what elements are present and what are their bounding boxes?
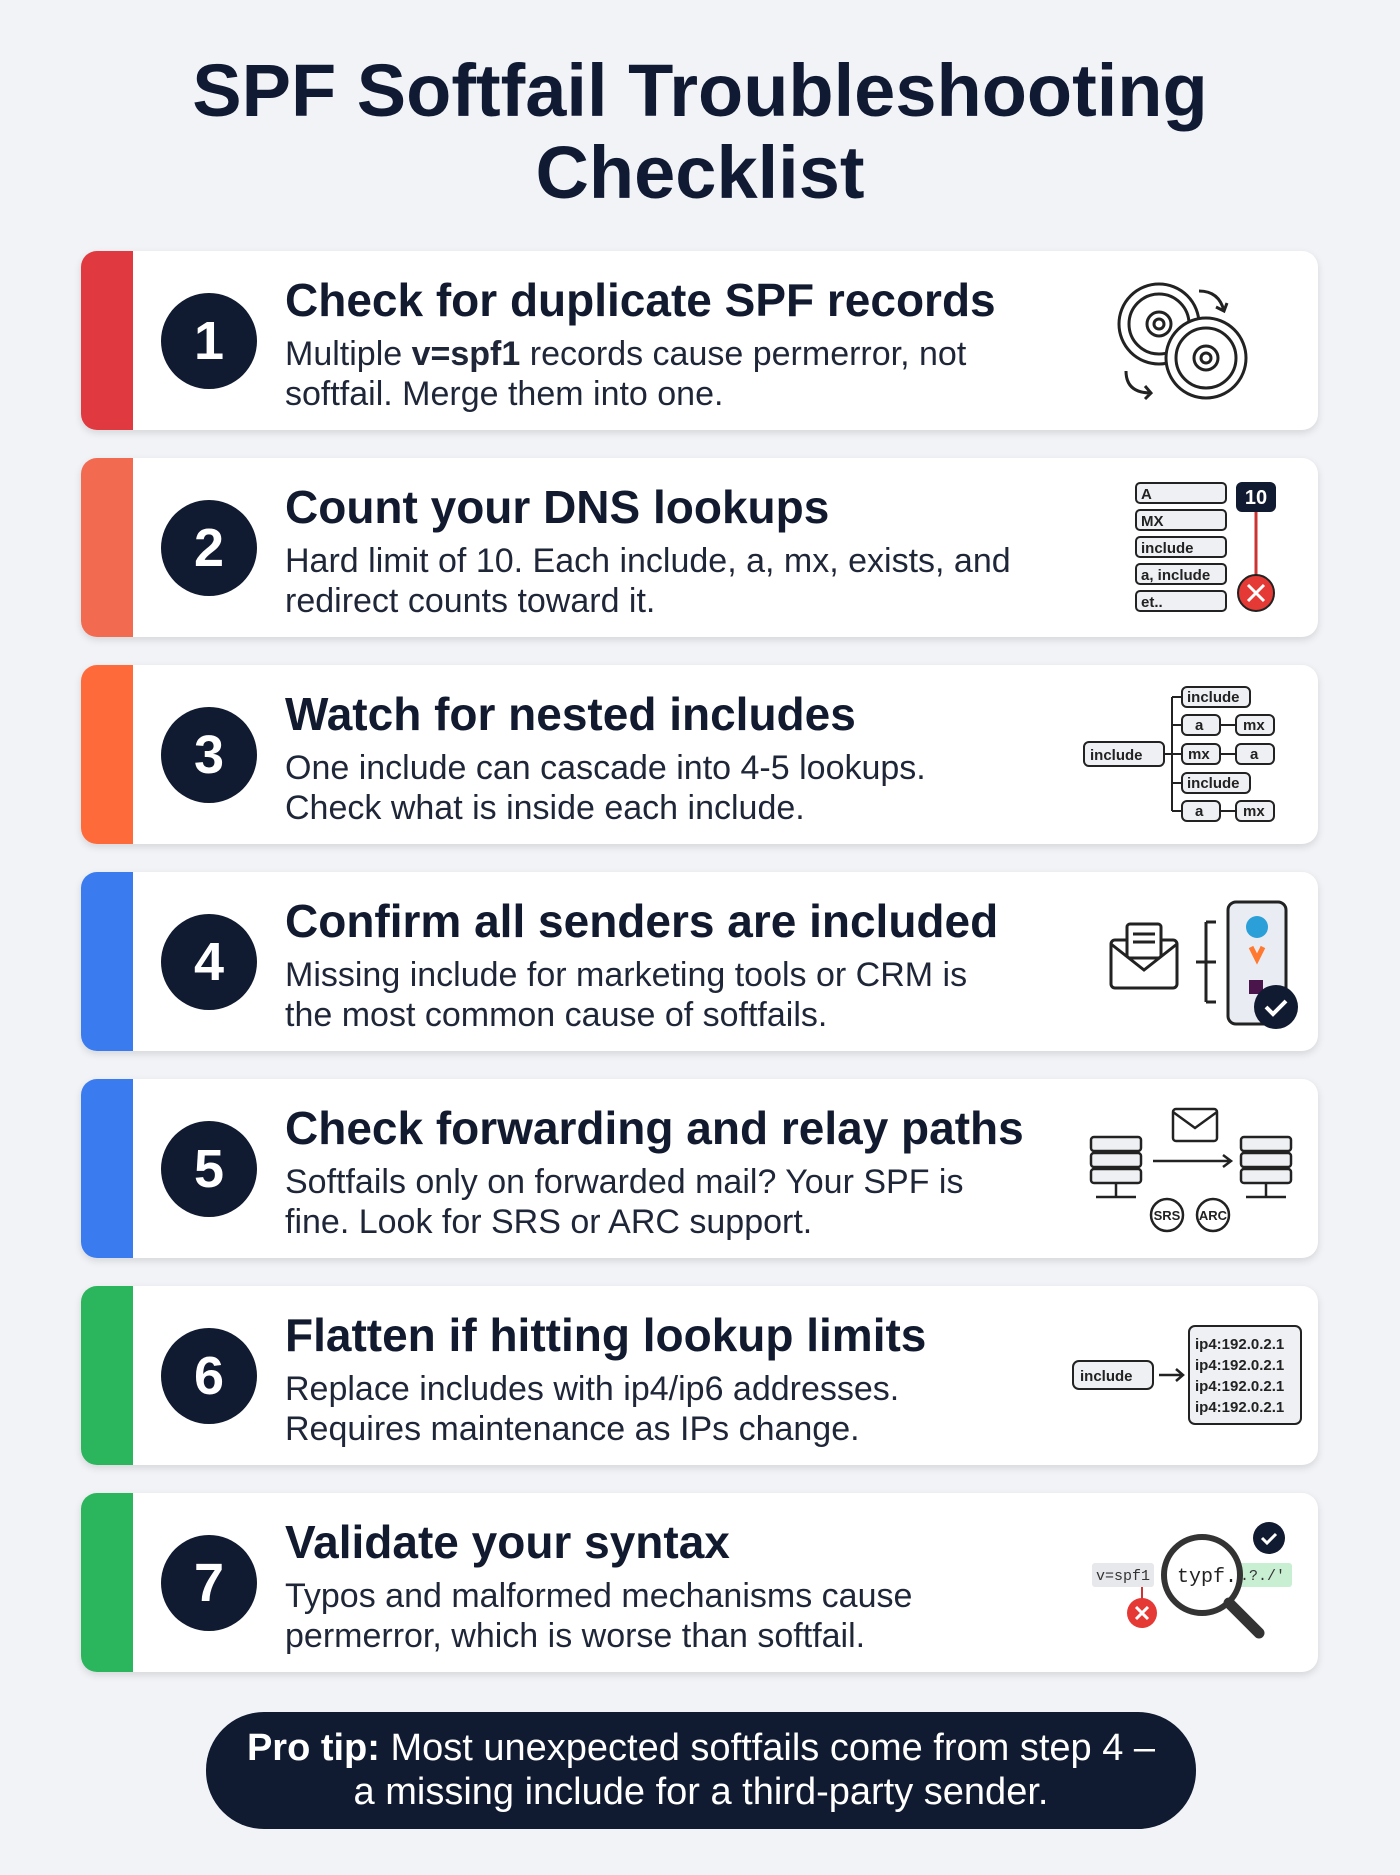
text: step 3 (285, 688, 926, 827)
number 5 (161, 1121, 257, 1217)
text: step 7: Typos and malformed mechanisms cause permerror, which is worse than softfail. (285, 1577, 912, 1655)
icon: flatten to ip list: ip4:192.0.2.1 (1195, 1336, 1284, 1353)
number 2: 2 (194, 518, 224, 578)
icon: nested tree: mx (1243, 803, 1265, 820)
text: step 4: Confirm all senders are included (285, 895, 998, 947)
icon: nested tree: a (1250, 746, 1259, 763)
text: step 7 (285, 1516, 912, 1655)
icon: forwarding servers (1090, 1108, 1292, 1232)
number 4 (161, 914, 257, 1010)
text: step 4: Missing include for marketing tools or CRM is the most common cause of softfails. (285, 956, 967, 1034)
icon: duplicate discs (1118, 282, 1248, 400)
text: step 3: One include can cascade into 4-5 lookups. Check what is inside each include. (285, 749, 926, 827)
panel: step 3 (81, 665, 1318, 844)
text: step 6: Flatten if hitting lookup limits (285, 1309, 926, 1361)
icon: magnifier syntax: typf. (1177, 1566, 1237, 1589)
text: step 2: Count your DNS lookups (285, 481, 829, 533)
text: step 6: Replace includes with ip4/ip6 addresses. Requires maintenance as IPs change. (285, 1370, 899, 1448)
icon: forwarding servers: SRS (1154, 1208, 1181, 1223)
number 1: 1 (194, 311, 224, 371)
panel: step 7 (81, 1493, 1318, 1672)
icon: lookup stack: include (1141, 540, 1194, 557)
icon: nested tree: mx (1243, 717, 1265, 734)
icon: flatten to ip list (1072, 1325, 1302, 1425)
icon: magnifier syntax: v=spf1 (1096, 1568, 1150, 1585)
panel: step 4 (81, 872, 1318, 1051)
icon: lookup stack: A (1141, 486, 1152, 503)
panel: step 6 (81, 1286, 1318, 1465)
icon: flatten to ip list: ip4:192.0.2.1 (1195, 1378, 1284, 1395)
callout: pro tip: a missing include for a third-party sender. (354, 1771, 1048, 1813)
icon: senders to phone (1110, 900, 1298, 1029)
icon: lookup stack: MX (1141, 513, 1164, 530)
icon: forwarding servers: ARC (1199, 1208, 1228, 1223)
number 5: 5 (194, 1139, 224, 1199)
icon: nested tree: include (1090, 747, 1143, 764)
title: Checklist (535, 131, 865, 214)
callout: pro tip: Pro tip: Most unexpected softfails come from step 4 – (247, 1727, 1155, 1769)
icon: flatten to ip list: ip4:192.0.2.1 (1195, 1357, 1284, 1374)
text: step 5: Softfails only on forwarded mail? Your SPF is fine. Look for SRS or ARC support. (285, 1163, 963, 1241)
icon: flatten to ip list: ip4:192.0.2.1 (1195, 1399, 1284, 1416)
text: step 6 (285, 1309, 926, 1448)
text: step 2 (285, 481, 1011, 620)
panel: step 1 (81, 251, 1318, 430)
text: step 2: Hard limit of 10. Each include, a, mx, exists, and redirect counts toward it. (285, 542, 1011, 620)
title (192, 49, 1208, 214)
number 2 (161, 500, 257, 596)
text: step 4 (285, 895, 998, 1034)
icon: nested tree: include (1187, 775, 1240, 792)
panel: step 2 (81, 458, 1318, 637)
icon: lookup stack (1135, 482, 1276, 612)
icon: lookup stack: a, include (1141, 567, 1210, 584)
number 3 (161, 707, 257, 803)
number 7: 7 (194, 1553, 224, 1613)
panel: step 5 (81, 1079, 1318, 1258)
text: step 3: Watch for nested includes (285, 688, 856, 740)
number 1 (161, 293, 257, 389)
text: step 1: Check for duplicate SPF records (285, 274, 996, 326)
text: step 1: Multiple v=spf1 records cause permerror, not softfail. Merge them into one. (285, 335, 966, 413)
text: step 5: Check forwarding and relay paths (285, 1102, 1024, 1154)
icon: magnifier syntax: .?./' (1240, 1568, 1285, 1585)
icon: flatten to ip list: include (1080, 1368, 1133, 1385)
icon: nested tree: a (1195, 803, 1204, 820)
text: step 1 (285, 274, 996, 413)
number 4: 4 (194, 932, 224, 992)
number 7 (161, 1535, 257, 1631)
number 6 (161, 1328, 257, 1424)
icon: lookup stack: et.. (1141, 594, 1163, 611)
icon: magnifier syntax (1092, 1522, 1292, 1638)
number 3: 3 (194, 725, 224, 785)
icon: nested tree: include (1187, 689, 1240, 706)
text: step 7: Validate your syntax (285, 1516, 730, 1568)
number 6: 6 (194, 1346, 224, 1406)
title: SPF Softfail Troubleshooting (192, 49, 1208, 132)
icon: lookup stack: 10 (1245, 487, 1267, 509)
icon: nested tree: mx (1188, 746, 1210, 763)
callout: pro tip (206, 1712, 1196, 1829)
icon: nested tree: a (1195, 717, 1204, 734)
icon: nested tree (1083, 686, 1275, 822)
text: step 5 (285, 1102, 1024, 1241)
